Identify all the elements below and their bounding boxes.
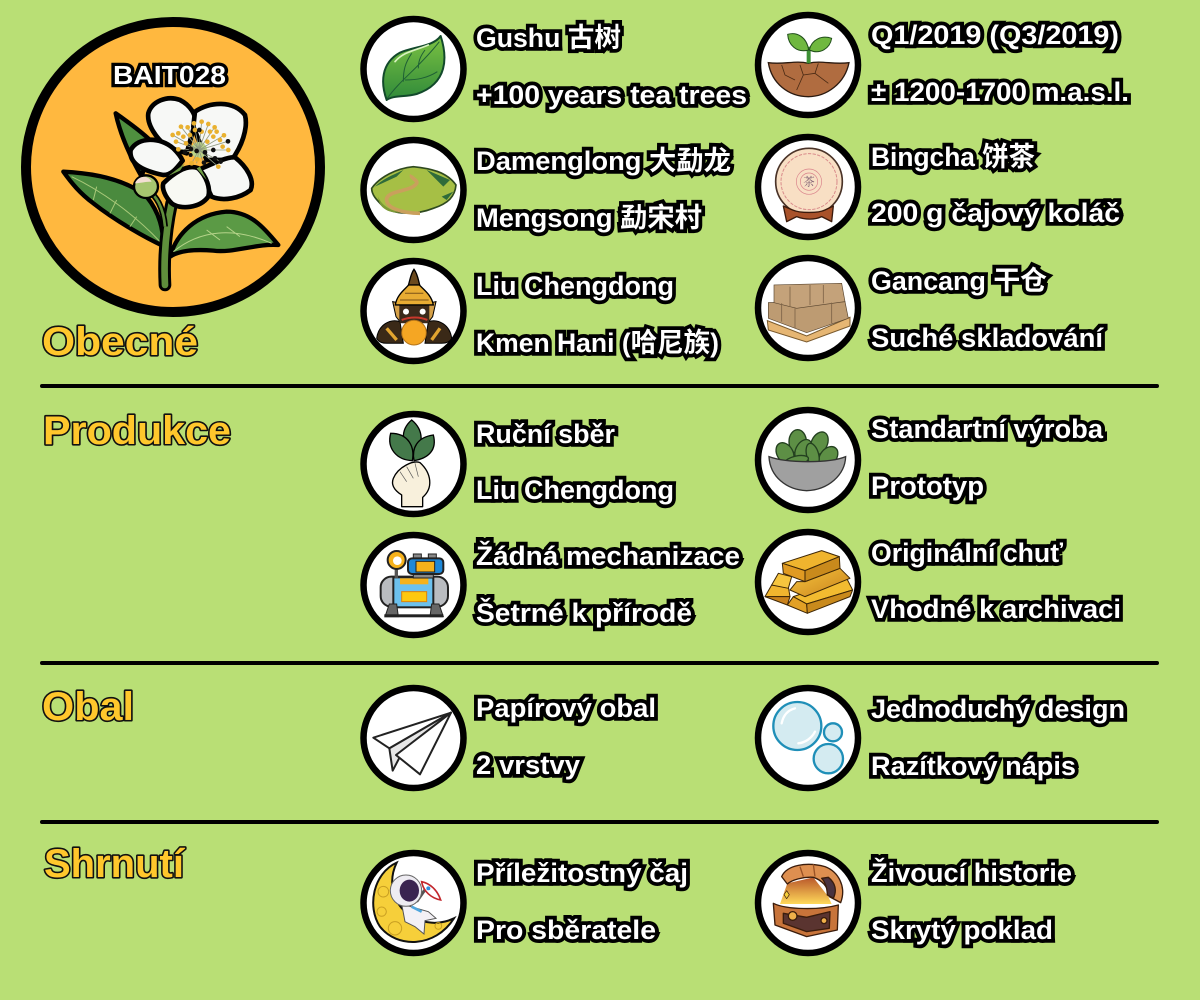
text: Příležitostný čaj: Příležitostný čaj [476, 858, 688, 888]
icon: sprout [758, 15, 858, 115]
badge: tea flower emblem [26, 22, 320, 312]
text: Liu Chengdong: Liu Chengdong [476, 271, 674, 301]
text: Papírový obal [476, 693, 656, 780]
text: Ruční sběr: Liu Chengdong [476, 475, 674, 505]
text: Damenglong: Mengsong 勐宋村 [476, 203, 702, 233]
text: Papírový obal: Papírový obal [476, 693, 656, 723]
heading: Obal: Obal [42, 685, 134, 729]
text: Žádná mechanizace: Šetrné k přírodě [476, 597, 692, 628]
item: Gancang [758, 258, 1105, 358]
icon: leaf [364, 19, 464, 119]
text: Gushu: +100 years tea trees [476, 80, 747, 110]
text: Bingcha: 200 g čajový koláč [871, 198, 1120, 228]
icon: hand with leaves [364, 414, 464, 514]
divider [42, 661, 1157, 665]
item: Standartní výroba [758, 410, 1104, 510]
icon: guardian figure [364, 261, 464, 361]
text: Gancang: Suché skladování [871, 323, 1105, 353]
text: harvest date: Q1/2019 (Q3/2019) [871, 20, 1119, 50]
icon: gold bars [758, 532, 858, 632]
text: Žádná mechanizace: Žádná mechanizace [476, 540, 740, 571]
text: Bingcha: Bingcha 饼茶 [871, 142, 1035, 172]
text: Živoucí historie [871, 857, 1072, 945]
item: Liu Chengdong [364, 261, 719, 361]
text: Gancang: Gancang 干仓 [871, 266, 1047, 296]
item: Ruční sběr [364, 414, 674, 514]
panel: Produkce [43, 409, 1121, 635]
text: Příležitostný čaj [476, 858, 688, 945]
text: Damenglong: Damenglong 大勐龙 [476, 146, 731, 176]
icon: treasure chest [758, 853, 858, 953]
text: Živoucí historie: Skrytý poklad [871, 915, 1053, 945]
text: Jednoduchý design: Jednoduchý design [871, 694, 1125, 724]
icon: tea flower [63, 98, 278, 285]
item: Bingcha [758, 137, 1120, 237]
text: harvest date [871, 20, 1129, 107]
item: harvest date [758, 15, 1129, 115]
panel: Obal [42, 685, 1125, 788]
text: Standartní výroba [871, 414, 1104, 501]
icon: pallet of boxes [758, 258, 858, 358]
text: Příležitostný čaj: Pro sběratele [476, 915, 656, 945]
item: Gushu [364, 19, 747, 119]
icon: paper plane [364, 688, 464, 788]
icon: tea cake [758, 137, 858, 237]
text: Liu Chengdong: Kmen Hani (哈尼族) [476, 328, 719, 358]
icon: machine [364, 535, 464, 635]
text: Ruční sběr: Ruční sběr [476, 419, 615, 449]
text: Gushu: Gushu 古树 [476, 23, 621, 53]
item: Papírový obal [364, 688, 656, 788]
heading: Shrnutí: Shrnutí [44, 842, 186, 886]
divider [42, 384, 1157, 388]
text: Standartní výroba: Standartní výroba [871, 414, 1104, 444]
text: Damenglong [476, 146, 731, 233]
panel: Obecné [26, 15, 1129, 364]
text: Bingcha [871, 142, 1120, 228]
item: Žádná mechanizace [364, 535, 740, 635]
text: Originální chuť: Vhodné k archivaci [871, 594, 1121, 624]
text: Liu Chengdong [476, 271, 719, 358]
icon: tea cake: 茶 [803, 174, 815, 190]
badge code: BAIT028 [113, 60, 226, 90]
text: harvest date: ± 1200-1700 m.a.s.l. [871, 77, 1129, 107]
text: Jednoduchý design [871, 694, 1125, 781]
text: Živoucí historie: Živoucí historie [871, 857, 1072, 888]
text: Žádná mechanizace [476, 540, 740, 628]
heading: Obecné: Obecné [42, 320, 198, 364]
icon: astronaut on moon [364, 853, 464, 953]
text: Gushu [476, 23, 747, 110]
text: Originální chuť [871, 538, 1121, 624]
text: Papírový obal: 2 vrstvy [476, 750, 580, 780]
icon: bubbles [758, 688, 858, 788]
text: Originální chuť: Originální chuť [871, 538, 1063, 568]
divider [42, 820, 1157, 824]
item: Živoucí historie [758, 853, 1072, 953]
panel: Shrnutí [44, 842, 1072, 953]
icon: landscape [364, 140, 464, 240]
item: Jednoduchý design [758, 688, 1125, 788]
item: Dachang [364, 140, 731, 240]
icon: bowl of leaves [758, 410, 858, 510]
text: Ruční sběr [476, 419, 674, 505]
heading: Produkce: Produkce [43, 409, 231, 453]
text: Standartní výroba: Prototyp [871, 471, 984, 501]
text: Gancang [871, 266, 1105, 353]
item: Příležitostný čaj [364, 853, 688, 953]
item: Originální chuť [758, 532, 1121, 632]
text: Jednoduchý design: Razítkový nápis [871, 751, 1076, 781]
